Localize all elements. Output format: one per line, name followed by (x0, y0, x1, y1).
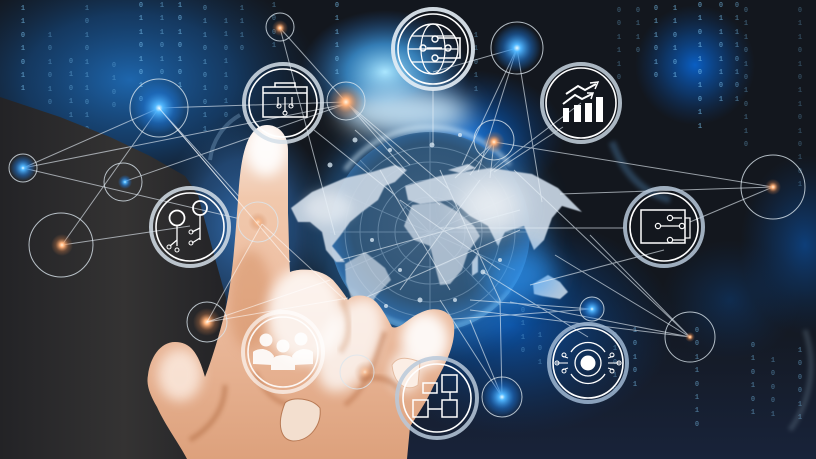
binary digit columns: 10001 (771, 357, 775, 419)
finger nails (280, 399, 320, 441)
binary digit columns: 011101 (335, 2, 339, 77)
icon: circuit card (625, 188, 703, 266)
binary digit columns: 01101101 (719, 2, 723, 104)
binary digit columns: 1010111010 (85, 5, 89, 134)
binary digit columns: 10101 (633, 327, 637, 389)
binary digit columns: 01011 (69, 58, 73, 120)
globe nodes (328, 133, 502, 308)
binary digit columns: 1101011 (21, 5, 25, 93)
suit sleeve (0, 97, 226, 459)
icon: target chip (549, 324, 627, 402)
binary digit columns: 0101101011 (698, 2, 702, 131)
hand with pointing finger (147, 124, 454, 459)
binary digit columns: 1010101 (178, 2, 182, 90)
icon: growth bar chart (542, 64, 620, 142)
binary digit columns: 101 (538, 332, 542, 367)
binary digit columns: 010101 (751, 342, 755, 417)
binary digit columns: 1001 (272, 2, 276, 50)
binary digit columns: 110101 (673, 5, 677, 80)
binary digit columns: 00110110 (695, 327, 699, 429)
binary digit columns: 001110 (617, 7, 621, 82)
binary digit columns: 111010 (160, 2, 164, 77)
binary digit columns: 11011010 (224, 18, 228, 120)
binary digit columns: 11011 (474, 32, 478, 94)
binary digit columns: 01101010 (139, 2, 143, 104)
network connection lines behind hand (23, 28, 773, 397)
binary digit columns: 0110 (636, 7, 640, 55)
binary digit columns: 01110101 (735, 2, 739, 104)
binary digit columns: 01101011010101 (798, 7, 802, 189)
lines crossing over the finger (159, 108, 348, 322)
binary digit columns: 1110 (240, 5, 244, 53)
continents (291, 164, 582, 325)
binary digit columns: 0110101011 (203, 5, 207, 134)
icon: flowchart (397, 358, 477, 438)
globe (210, 90, 811, 430)
binary digit columns: 101010 (48, 32, 52, 107)
icon: briefcase (244, 64, 322, 142)
icon: people group (243, 312, 323, 392)
binary digit columns: 100011 (798, 347, 802, 422)
icon: keys with circuit traces (151, 188, 229, 266)
icon: wire globe with circuit (393, 9, 473, 89)
binary digit columns: 0100 (112, 62, 116, 110)
binary digit columns: 01101010110 (744, 7, 748, 149)
binary digit columns: 01010 (613, 332, 617, 394)
binary digit columns: 0110 (521, 307, 525, 355)
binary digit columns: 011010 (654, 5, 658, 80)
